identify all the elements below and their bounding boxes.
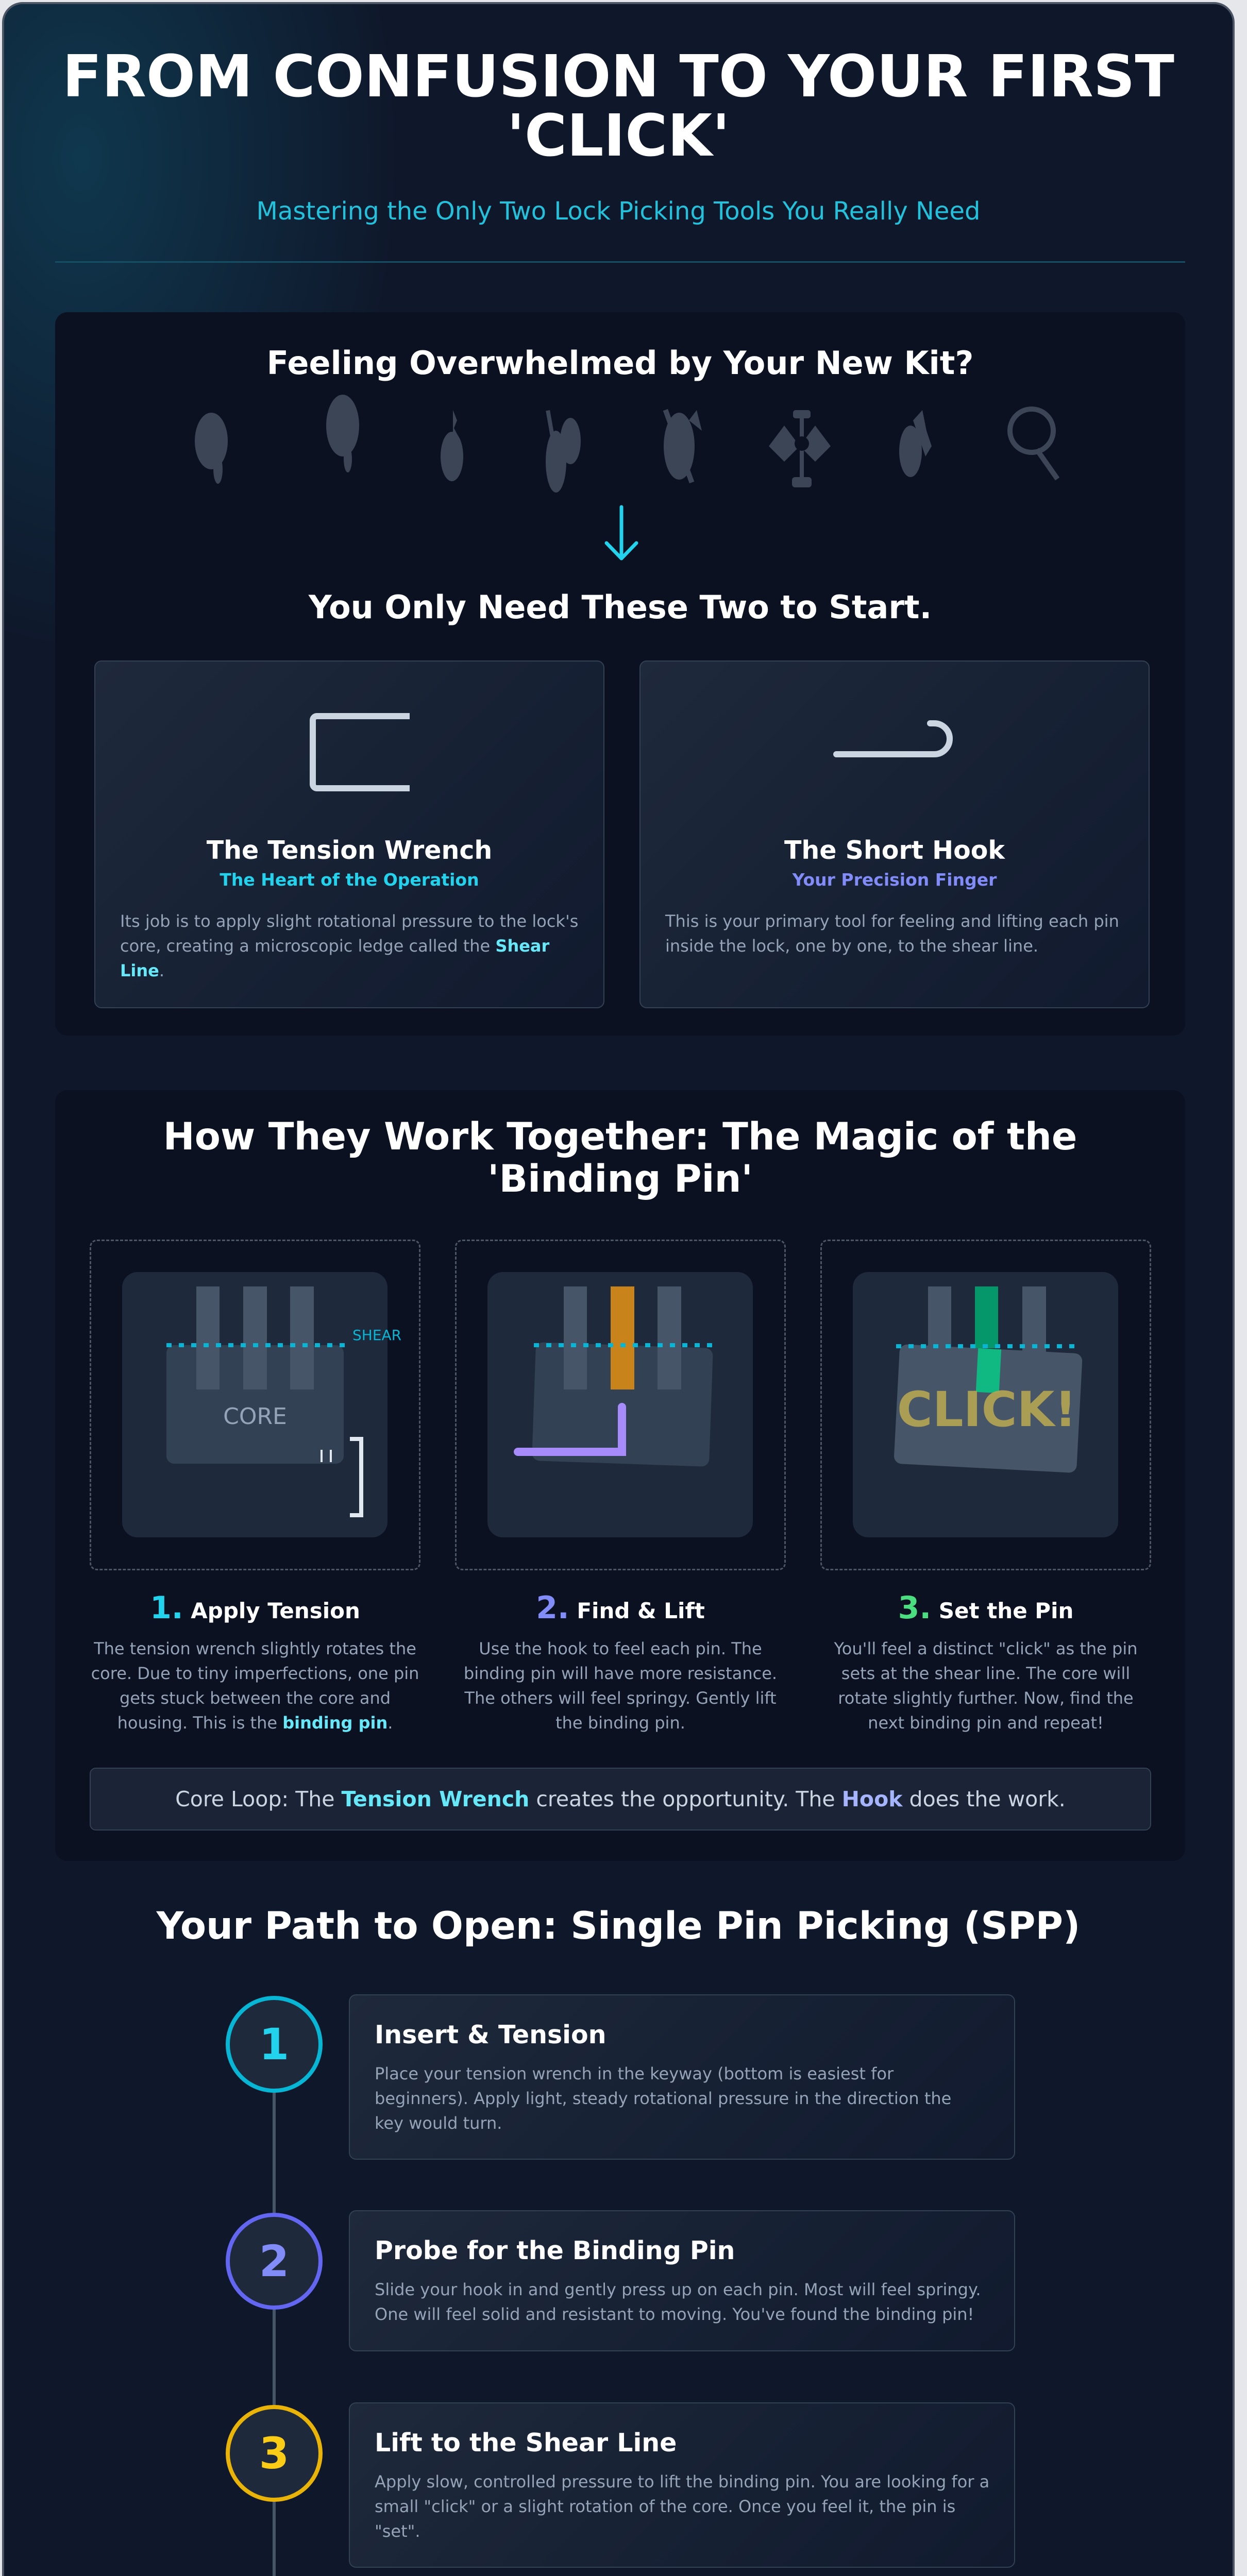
step circle 1: [226, 1996, 323, 2093]
title: FROM CONFUSION TO YOUR FIRST: [62, 43, 1174, 110]
timeline line: [273, 2044, 276, 2576]
card: probe: [349, 2210, 1015, 2351]
card: insert: [349, 1994, 1015, 2160]
card: tension wrench: [94, 660, 604, 1008]
icon: wrench: [310, 713, 410, 791]
subtitle: precision: Your Precision Finger: [793, 870, 997, 890]
diagram 1: [90, 1240, 420, 1570]
subtitle: Mastering the Only Two Lock Picking Tools You Really Need: [257, 197, 980, 226]
card: probe: Slide your hook in and gently press up on each pin. Most will feel springy. One will feel solid and resistant to moving. You've found the binding pin!: [375, 2280, 981, 2324]
card: insert: Place your tension wrench in the keyway (bottom is easiest for beginners). Apply light, steady rotational pressure in the direction the key would turn.: [375, 2064, 951, 2133]
step 3: 3. Set the Pin: [898, 1590, 1073, 1626]
heading: binding pin: [163, 1115, 1077, 1201]
panel: binding pin: CORE: [223, 1403, 287, 1430]
step circle 3: [226, 2405, 323, 2502]
step circle 2: 2: [259, 2236, 289, 2286]
callout: core loop: Core Loop: The Tension Wrench creates the opportunity. The Hook does the work.: [175, 1787, 1066, 1811]
panel: binding pin: SHEAR: [352, 1327, 401, 1344]
step 2: Use the hook to feel each pin. The binding pin will have more resistance. The others will feel springy. Gently lift the binding pin.: [464, 1639, 777, 1733]
step 3: [834, 1590, 1138, 1733]
card: short hook: [639, 660, 1150, 1008]
diagram 2: [455, 1240, 786, 1570]
card: lift: Lift to the Shear Line: [375, 2428, 677, 2458]
diagram 3: [820, 1240, 1151, 1570]
step 2: 2. Find & Lift: [536, 1590, 705, 1626]
panel: binding pin: [55, 1090, 1185, 1861]
subtitle: heart: The Heart of the Operation: [220, 870, 479, 890]
step circle 2: [226, 2213, 323, 2310]
arrow: down: [605, 505, 638, 561]
icon: hook: [833, 720, 953, 757]
heading: path: Your Path to Open: Single Pin Picking (SPP): [157, 1904, 1080, 1948]
label: short hook: The Short Hook: [784, 836, 1005, 865]
label: tension wrench: The Tension Wrench: [207, 836, 492, 865]
step 3: You'll feel a distinct "click" as the pin sets at the shear line. The core will rotate slightly further. Now, find the next binding pin and repeat!: [834, 1639, 1138, 1733]
heading: overwhelmed: Feeling Overwhelmed by Your New Kit?: [267, 344, 973, 382]
step 1: [91, 1590, 419, 1733]
card: insert: Insert & Tension: [375, 2020, 606, 2049]
text: wrench desc: Its job is to apply slight rotational pressure to the lock's core, creating a microscopic ledge called the Shear Line.: [120, 911, 578, 980]
step circle 3: 3: [259, 2428, 289, 2479]
panel: binding pin: CLICK!: [897, 1382, 1076, 1438]
icon row: cluttered tools: [195, 395, 1059, 493]
title: 'CLICK': [507, 103, 730, 170]
heading: two tools: You Only Need These Two to Start.: [309, 588, 932, 626]
step 2: [464, 1590, 777, 1733]
step 1: 1. Apply Tension: [150, 1590, 360, 1626]
card: lift: Apply slow, controlled pressure to lift the binding pin. You are looking for a small "click" or a slight rotation of the core. Once you feel it, the pin is "set".: [375, 2472, 989, 2541]
text: hook desc: This is your primary tool for feeling and lifting each pin inside the lock, one by one, to the shear line.: [665, 911, 1119, 956]
step 1: The tension wrench slightly rotates the core. Due to tiny imperfections, one pin gets stuck between the core and housing. This is the binding pin.: [91, 1639, 419, 1733]
heading: binding pin: How They Work Together: The Magic of the: [163, 1115, 1077, 1159]
heading: binding pin: 'Binding Pin': [487, 1157, 753, 1201]
panel: overwhelmed: [55, 312, 1185, 1036]
card: probe: Probe for the Binding Pin: [375, 2236, 735, 2265]
step circle 1: 1: [259, 2019, 289, 2070]
card: lift: [349, 2402, 1015, 2568]
title: [62, 43, 1174, 170]
callout: core loop: [90, 1768, 1151, 1831]
